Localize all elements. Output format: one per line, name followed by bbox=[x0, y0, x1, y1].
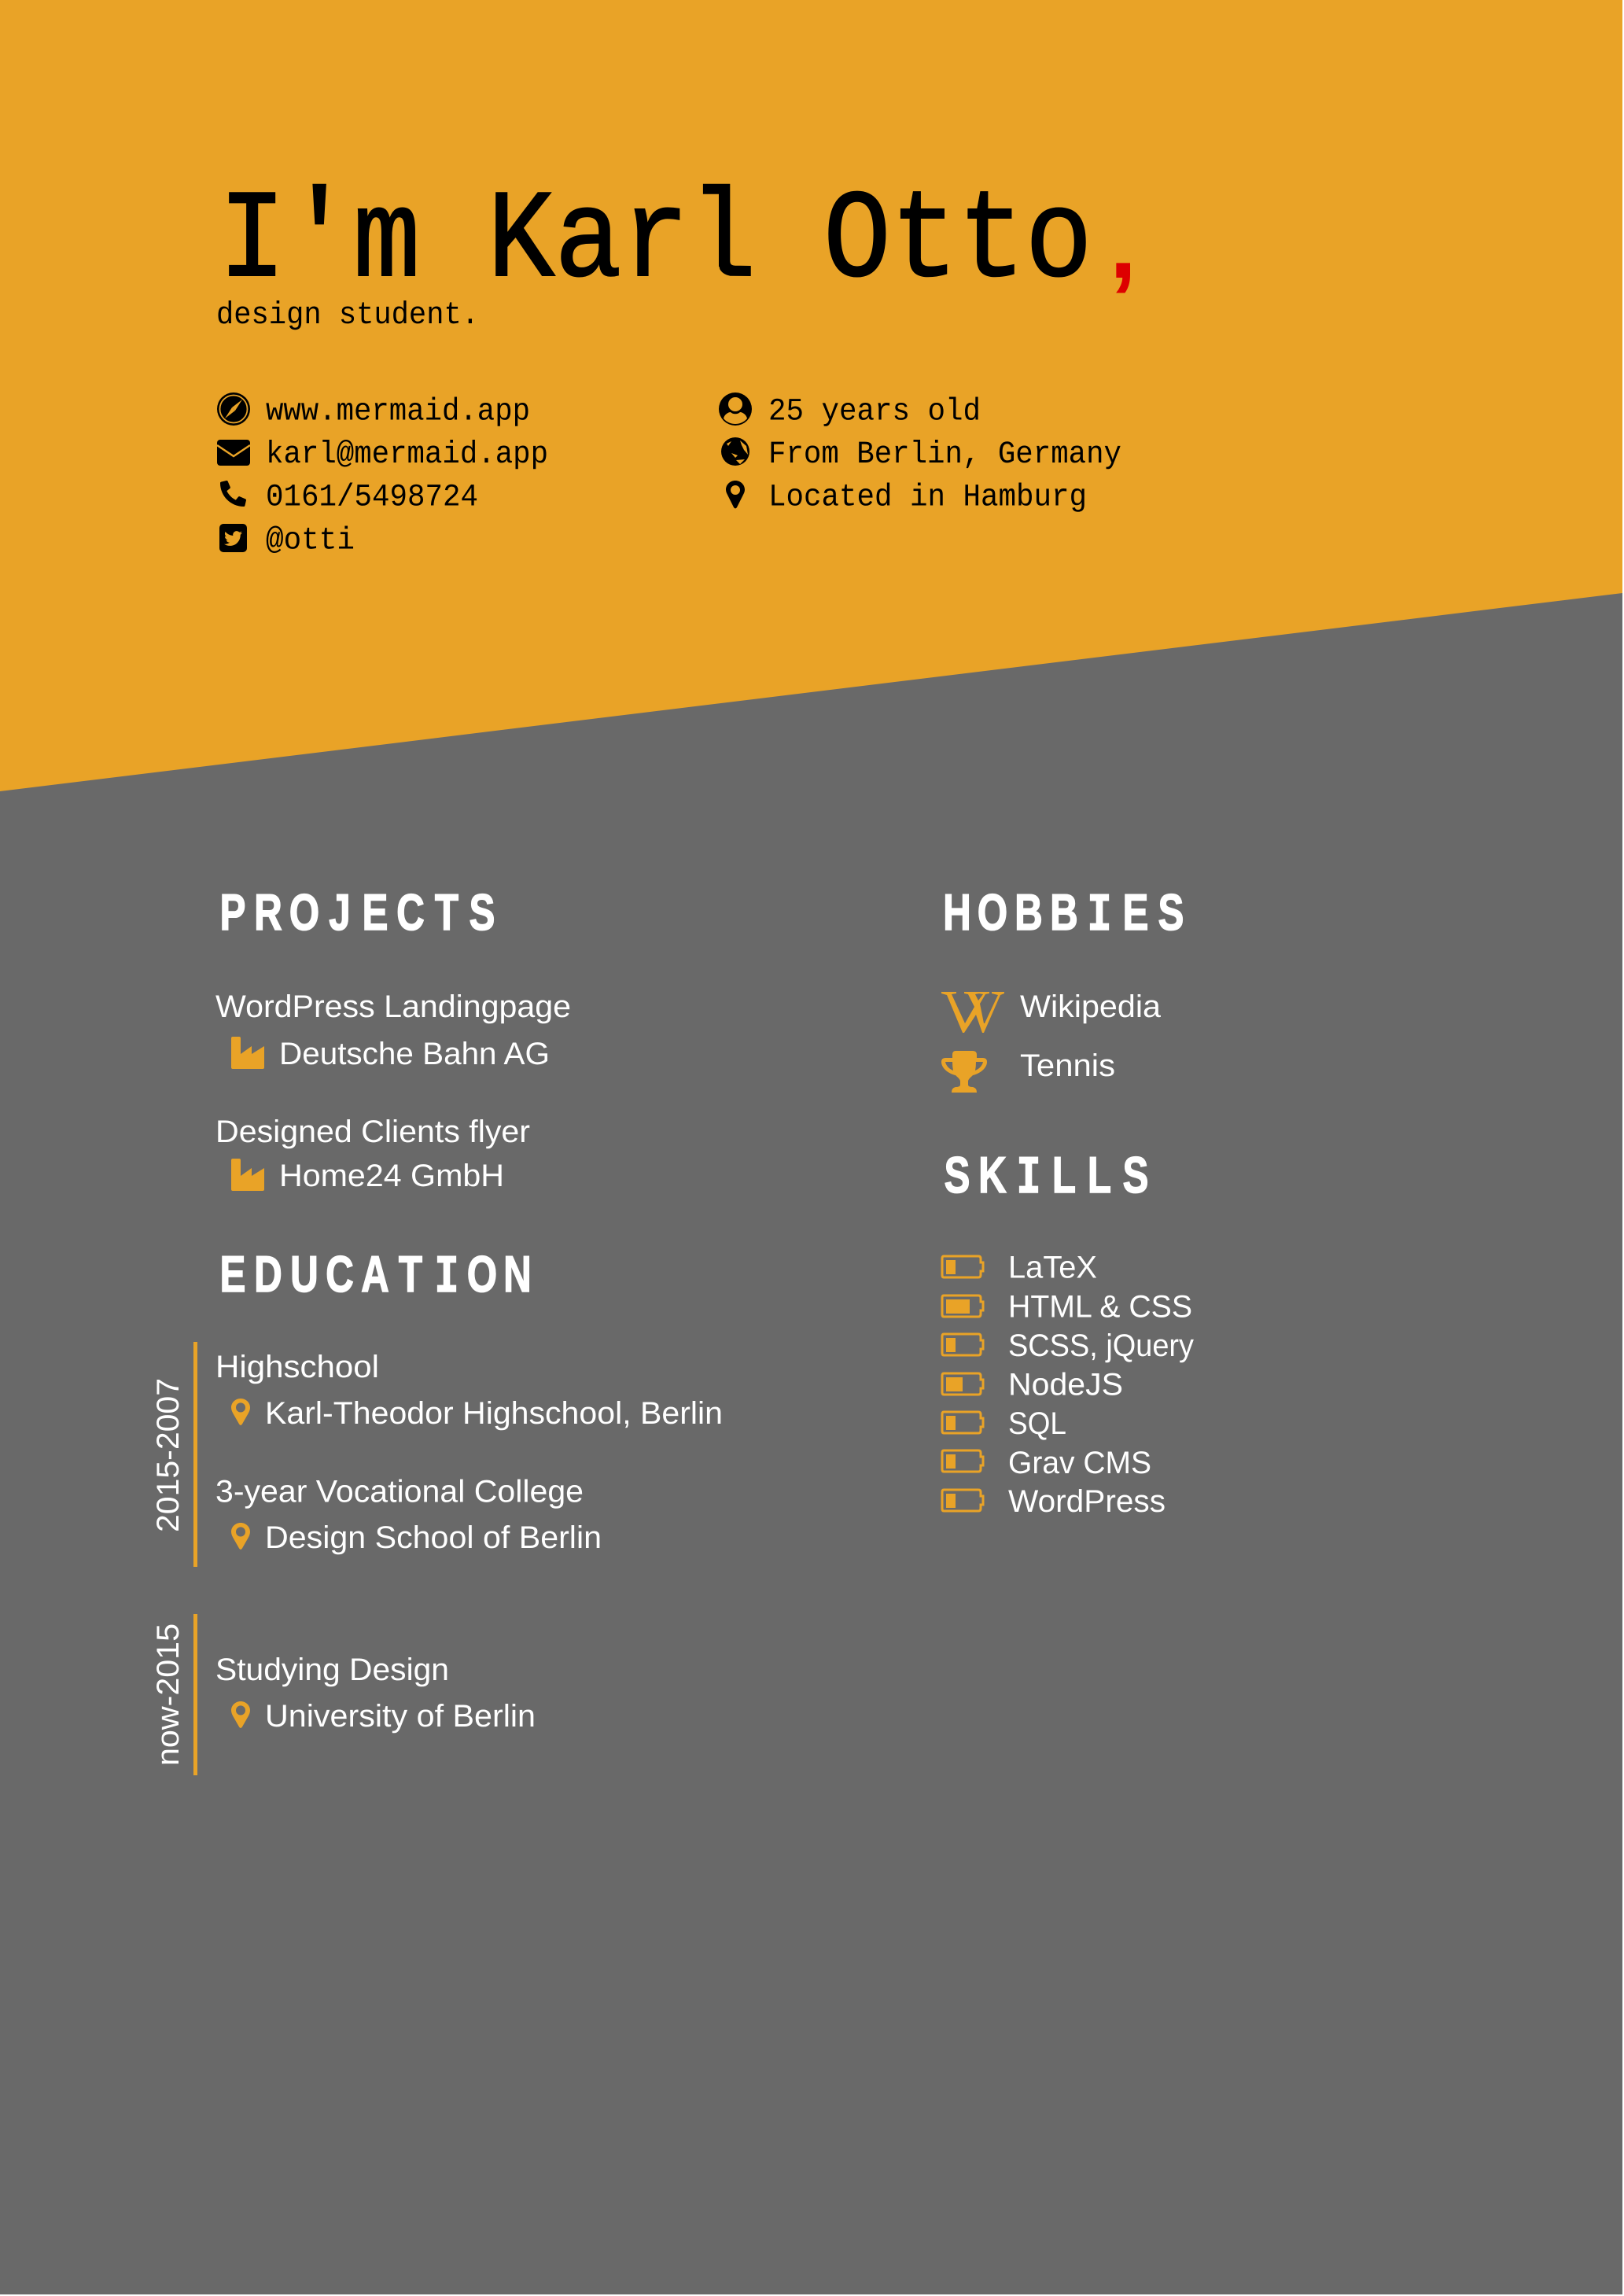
icon: map pin bbox=[726, 481, 745, 508]
personal: age bbox=[719, 392, 981, 429]
panel: hobbies bbox=[941, 883, 1184, 1093]
project name 2: Designed Clients flyer bbox=[215, 1115, 530, 1149]
school place 2: Design School of Berlin bbox=[265, 1520, 602, 1555]
university name: Studying Design bbox=[215, 1653, 449, 1687]
personal: origin bbox=[721, 437, 1121, 473]
skill name: HTML & CSS bbox=[1008, 1290, 1192, 1325]
skill: NodeJS bbox=[942, 1367, 1123, 1402]
skill name: WordPress bbox=[1008, 1484, 1166, 1519]
icon: person bbox=[719, 392, 752, 426]
icon: globe bbox=[721, 437, 749, 466]
contact: email bbox=[217, 437, 548, 473]
timeline bar 2 bbox=[193, 1614, 197, 1775]
text: website: www.mermaid.app bbox=[266, 395, 530, 429]
battery level bbox=[942, 1450, 983, 1472]
skill: HTML and CSS bbox=[942, 1290, 1192, 1325]
panel: header bbox=[216, 171, 1136, 558]
panel: projects bbox=[215, 883, 571, 1193]
skill: Grav CMS bbox=[942, 1446, 1151, 1480]
skill: LaTeX bbox=[942, 1251, 1097, 1285]
panel: skills bbox=[942, 1146, 1194, 1519]
timeline label 2: now-2015 bbox=[151, 1623, 186, 1766]
heading: projects: PROJECTS bbox=[220, 883, 495, 941]
icon: pin bbox=[231, 1701, 250, 1728]
hobby: wikipedia: Wikipedia bbox=[1020, 990, 1162, 1024]
background: orange slanted header bbox=[0, 0, 1622, 791]
icon: compass bbox=[217, 392, 250, 426]
timeline bar 1 bbox=[193, 1342, 197, 1567]
text: twitter: @otti bbox=[266, 524, 355, 558]
text: location: Located in Hamburg bbox=[768, 480, 1087, 516]
text: origin: From Berlin, Germany bbox=[768, 437, 1121, 473]
battery level bbox=[942, 1490, 983, 1511]
battery level bbox=[942, 1373, 983, 1395]
icon: trophy bbox=[941, 1051, 987, 1093]
panel: education bbox=[151, 1245, 723, 1775]
project client 1: Deutsche Bahn AG bbox=[279, 1037, 550, 1071]
icon: twitter bbox=[219, 524, 247, 552]
contact: phone bbox=[220, 480, 478, 516]
timeline label 1: 2015-2007 bbox=[151, 1378, 186, 1532]
heading: skills: SKILLS bbox=[945, 1146, 1148, 1209]
skill: SCSS, jQuery bbox=[942, 1329, 1194, 1363]
university place: University of Berlin bbox=[265, 1699, 536, 1734]
skill: SQL bbox=[942, 1406, 1066, 1441]
title: , bbox=[1110, 190, 1136, 299]
battery level bbox=[942, 1256, 983, 1277]
icon: envelope bbox=[217, 440, 250, 466]
skill name: LaTeX bbox=[1008, 1251, 1097, 1285]
skill name: Grav CMS bbox=[1008, 1446, 1151, 1480]
heading: hobbies: HOBBIES bbox=[943, 883, 1184, 946]
hobby: tennis: Tennis bbox=[1020, 1048, 1115, 1083]
text: email: karl@mermaid.app bbox=[266, 437, 548, 473]
battery level bbox=[942, 1334, 983, 1355]
skill name: SCSS, jQuery bbox=[1008, 1329, 1194, 1363]
icon: wikipedia W bbox=[941, 992, 1004, 1033]
school name 1: Highschool bbox=[215, 1350, 379, 1384]
personal: location bbox=[726, 480, 1087, 516]
skill name: SQL bbox=[1008, 1406, 1066, 1441]
subtitle: design student. bbox=[216, 298, 479, 334]
battery level bbox=[942, 1295, 983, 1317]
project client 2: Home24 GmbH bbox=[279, 1159, 504, 1193]
project name 1: WordPress Landingpage bbox=[215, 990, 571, 1024]
contact: twitter bbox=[219, 524, 355, 558]
contact: website bbox=[217, 392, 530, 429]
icon: pin bbox=[231, 1523, 250, 1550]
school place 1: Karl-Theodor Highschool, Berlin bbox=[265, 1396, 723, 1431]
skill name: NodeJS bbox=[1008, 1367, 1123, 1402]
battery level bbox=[942, 1412, 983, 1433]
icon: pin bbox=[231, 1399, 250, 1425]
text: phone: 0161/5498724 bbox=[266, 480, 478, 516]
skill: WordPress bbox=[942, 1484, 1166, 1519]
heading: education: EDUCATION bbox=[220, 1245, 532, 1308]
title: I'm Karl Otto bbox=[219, 171, 1092, 313]
icon: factory bbox=[231, 1037, 264, 1069]
school name 2: 3-year Vocational College bbox=[215, 1474, 584, 1509]
text: age: 25 years old bbox=[768, 395, 981, 429]
icon: factory bbox=[231, 1159, 264, 1191]
icon: phone bbox=[220, 481, 246, 507]
